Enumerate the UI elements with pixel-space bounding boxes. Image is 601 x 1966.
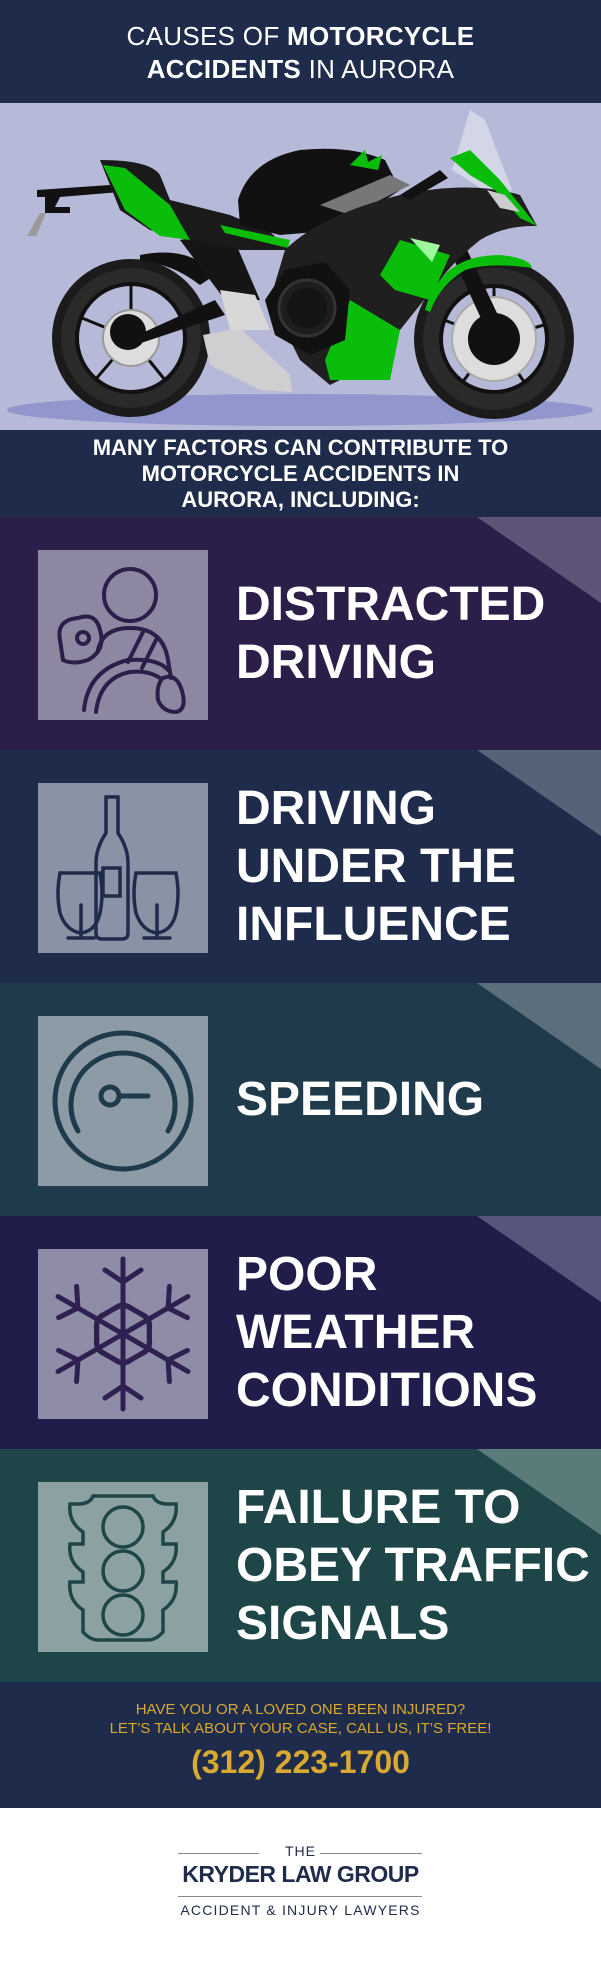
exhaust bbox=[203, 328, 292, 392]
logo: THE bbox=[285, 1843, 316, 1859]
title header bbox=[0, 0, 601, 103]
cta text: LET’S TALK ABOUT YOUR CASE, CALL US, IT’S FREE! bbox=[110, 1720, 491, 1737]
icon: traffic light bbox=[38, 1482, 208, 1652]
heading: failure to obey traffic signals: FAILURE TO bbox=[236, 1480, 520, 1534]
heading: distracted driving: DISTRACTED bbox=[236, 578, 545, 630]
heading: driving under the influence: INFLUENCE bbox=[236, 898, 511, 950]
panel: poor weather conditions bbox=[0, 1216, 601, 1449]
front wheel bbox=[414, 259, 574, 419]
heading: failure to obey traffic signals: SIGNALS bbox=[236, 1596, 449, 1650]
engine bbox=[265, 262, 350, 355]
front fender bbox=[425, 255, 532, 312]
heading: driving under the influence: DRIVING bbox=[236, 782, 436, 834]
front fork bbox=[445, 235, 505, 338]
panel: failure to obey traffic signals bbox=[0, 1449, 601, 1682]
shadow bbox=[7, 394, 593, 426]
title header: CAUSES OF MOTORCYCLE bbox=[127, 21, 474, 51]
cta text bbox=[110, 1701, 491, 1737]
rear wheel bbox=[52, 259, 210, 417]
heading: driving under the influence bbox=[236, 782, 516, 950]
icon: snowflake bbox=[38, 1249, 208, 1419]
heading: speeding: SPEEDING bbox=[236, 1072, 484, 1126]
subheading: MOTORCYCLE ACCIDENTS IN bbox=[142, 461, 459, 486]
heading: poor weather conditions: CONDITIONS bbox=[236, 1364, 537, 1416]
call to action bbox=[0, 1682, 601, 1808]
panel: driving under the influence bbox=[0, 750, 601, 983]
cta text: HAVE YOU OR A LOVED ONE BEEN INJURED? bbox=[136, 1701, 465, 1718]
icon: driver with food bbox=[38, 550, 208, 720]
heading: distracted driving bbox=[236, 578, 545, 688]
logo bbox=[178, 1843, 422, 1918]
green side panels bbox=[380, 240, 450, 300]
tank bbox=[238, 149, 400, 235]
heading: poor weather conditions: POOR bbox=[236, 1248, 377, 1300]
heading: poor weather conditions: WEATHER bbox=[236, 1306, 475, 1358]
heading: failure to obey traffic signals bbox=[236, 1480, 590, 1650]
tail rack bbox=[37, 185, 120, 213]
heading: driving under the influence: UNDER THE bbox=[236, 840, 516, 892]
windshield bbox=[452, 110, 512, 200]
logo: KRYDER LAW GROUP bbox=[182, 1861, 419, 1887]
panel: distracted driving bbox=[0, 517, 601, 750]
motorcycle illustration bbox=[0, 103, 601, 430]
icon: wine bottle and glasses bbox=[38, 783, 208, 953]
rear fender/swingarm bbox=[140, 252, 215, 285]
heading: failure to obey traffic signals: OBEY TRAFFIC bbox=[236, 1538, 590, 1592]
phone number: (312) 223-1700 bbox=[191, 1744, 410, 1780]
panel: speeding bbox=[0, 983, 601, 1216]
tail section bbox=[100, 160, 290, 250]
subheading bbox=[0, 430, 601, 517]
icon: speedometer bbox=[38, 1016, 208, 1186]
main fairing bbox=[270, 188, 537, 385]
heading: distracted driving: DRIVING bbox=[236, 636, 436, 688]
subheading: AURORA, INCLUDING: bbox=[181, 487, 420, 512]
swingarm bbox=[131, 300, 225, 345]
logo: ACCIDENT & INJURY LAWYERS bbox=[180, 1902, 421, 1918]
rear frame bbox=[180, 230, 260, 300]
handlebar bbox=[400, 170, 448, 200]
heading: poor weather conditions bbox=[236, 1248, 537, 1416]
subheading: MANY FACTORS CAN CONTRIBUTE TO bbox=[93, 435, 508, 460]
title header: ACCIDENTS IN AURORA bbox=[147, 54, 454, 84]
